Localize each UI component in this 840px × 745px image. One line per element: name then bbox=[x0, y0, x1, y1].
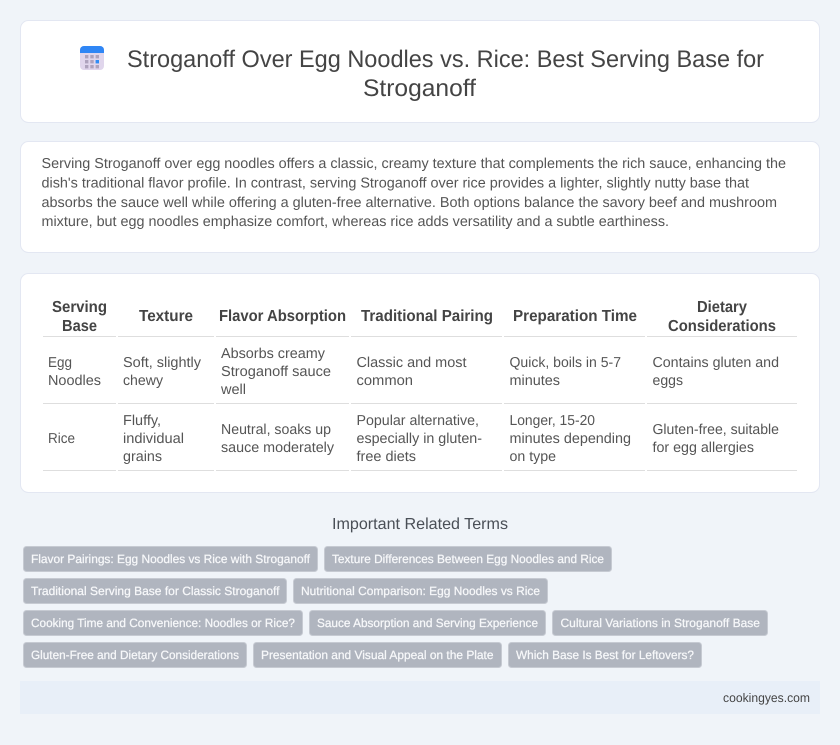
table header row: Traditional Pairing bbox=[361, 308, 493, 325]
table row: egg noodles: minutes bbox=[510, 373, 560, 389]
tag: nutritional comparison: Nutritional Comparison: Egg Noodles vs Rice bbox=[301, 584, 540, 598]
table row: egg noodles: eggs bbox=[652, 373, 683, 389]
table row: egg noodles bbox=[48, 346, 779, 398]
header panel bbox=[20, 20, 820, 122]
title bbox=[127, 46, 764, 102]
table row: rice: on type bbox=[510, 449, 556, 465]
table header row bbox=[52, 299, 776, 335]
footer bbox=[20, 681, 820, 714]
table row: rice: especially in gluten- bbox=[356, 431, 482, 447]
tag: texture differences: Texture Differences Between Egg Noodles and Rice bbox=[332, 552, 604, 566]
heading: important related terms: Important Related Terms bbox=[332, 516, 508, 533]
tag: gluten-free: Gluten-Free and Dietary Considerations bbox=[31, 648, 239, 662]
table row: egg noodles: Egg bbox=[48, 355, 72, 371]
table row: rice: individual bbox=[123, 431, 184, 447]
table row: rice: Longer, 15-20 bbox=[510, 413, 595, 429]
table row: rice: sauce moderately bbox=[221, 440, 335, 456]
icon: calendar bbox=[80, 46, 104, 70]
tag: leftovers bbox=[508, 642, 702, 668]
table row: egg noodles: Stroganoff sauce bbox=[221, 364, 331, 380]
table row: egg noodles: Soft, slightly bbox=[123, 355, 202, 371]
panel: introduction bbox=[20, 142, 820, 252]
table row: egg noodles: Noodles bbox=[48, 373, 101, 389]
table header row: Flavor Absorption bbox=[219, 308, 346, 325]
table header row: Preparation Time bbox=[513, 308, 637, 325]
tag: sauce absorption: Sauce Absorption and Serving Experience bbox=[317, 616, 538, 630]
table row: rice: free diets bbox=[356, 449, 416, 465]
intro paragraph: dish's traditional flavor profile. In contrast, serving Stroganoff over rice provides a lighter, slightly nutty base that bbox=[42, 175, 749, 191]
related term tags bbox=[24, 546, 768, 668]
table row: rice: Rice bbox=[48, 431, 75, 447]
tag: presentation bbox=[254, 642, 502, 668]
intro paragraph: mixture, but egg noodles emphasize comfort, whereas rice adds versatility and a subtle earthiness. bbox=[42, 214, 669, 230]
tag: nutritional comparison bbox=[294, 578, 548, 604]
tag: cooking time: Cooking Time and Convenience: Noodles or Rice? bbox=[31, 616, 295, 630]
table header row: Dietary bbox=[697, 299, 747, 316]
tag: cultural variations: Cultural Variations in Stroganoff Base bbox=[560, 616, 760, 630]
table row: rice: Fluffy, bbox=[123, 413, 161, 429]
tag: sauce absorption bbox=[310, 610, 546, 636]
table row: rice: Neutral, soaks up bbox=[221, 422, 331, 438]
table row: egg noodles: well bbox=[220, 382, 246, 398]
tag: flavor pairings bbox=[24, 546, 318, 572]
table row: rice: for egg allergies bbox=[652, 440, 754, 456]
tag: traditional serving base: Traditional Serving Base for Classic Stroganoff bbox=[31, 584, 280, 598]
tag: gluten-free bbox=[24, 642, 246, 668]
tag: cultural variations bbox=[552, 610, 768, 636]
table row: rice: Popular alternative, bbox=[356, 413, 479, 429]
panel: comparison table bbox=[20, 274, 820, 492]
footer site name: cookingyes.com bbox=[723, 691, 810, 705]
title: Stroganoff Over Egg Noodles vs. Rice: Best Serving Base for bbox=[127, 46, 764, 73]
table header row: Considerations bbox=[668, 318, 776, 335]
tag: cooking time bbox=[24, 610, 302, 636]
table row: rice bbox=[48, 413, 779, 465]
tag: texture differences bbox=[324, 546, 612, 572]
tag: traditional serving base bbox=[24, 578, 286, 604]
intro paragraph: Serving Stroganoff over egg noodles offers a classic, creamy texture that complements the rich sauce, enhancing the bbox=[42, 156, 786, 172]
title: Stroganoff bbox=[363, 75, 476, 102]
table header row: Base bbox=[62, 318, 97, 335]
tag: presentation: Presentation and Visual Appeal on the Plate bbox=[261, 648, 494, 662]
intro paragraph: absorbs the sauce well while offering a gluten-free alternative. Both options balance the savory beef and mushroom bbox=[42, 195, 777, 211]
table row: rice: Gluten-free, suitable bbox=[652, 422, 779, 438]
tag: leftovers: Which Base Is Best for Leftovers? bbox=[516, 648, 694, 662]
table header row: Serving bbox=[52, 299, 107, 316]
table row: egg noodles: common bbox=[356, 373, 413, 389]
table row: egg noodles: Contains gluten and bbox=[652, 355, 779, 371]
intro paragraph bbox=[42, 156, 786, 230]
tag: flavor pairings: Flavor Pairings: Egg Noodles vs Rice with Stroganoff bbox=[31, 552, 311, 566]
table row: rice: grains bbox=[123, 449, 162, 465]
table row: egg noodles: Absorbs creamy bbox=[221, 346, 326, 362]
table row: rice: minutes depending bbox=[510, 431, 631, 447]
table header row: Texture bbox=[139, 308, 193, 325]
table row: egg noodles: Quick, boils in 5-7 bbox=[510, 355, 621, 371]
table row: egg noodles: chewy bbox=[123, 373, 164, 389]
table row: egg noodles: Classic and most bbox=[356, 355, 466, 371]
